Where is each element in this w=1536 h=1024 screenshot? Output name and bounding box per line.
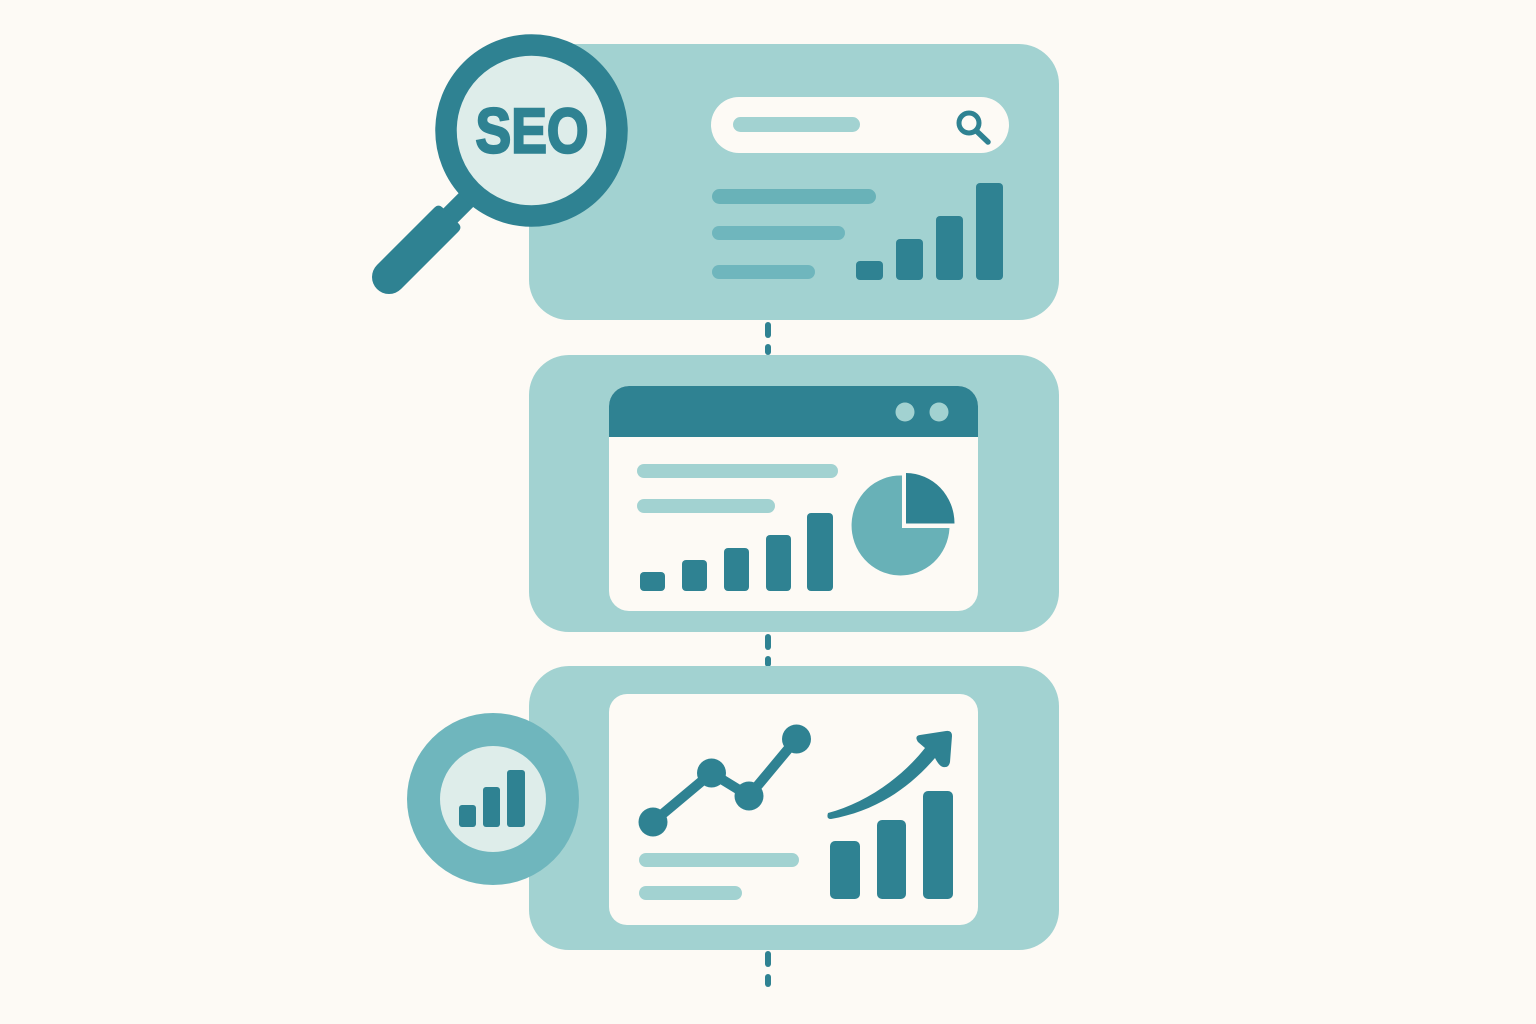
pie chart [852,473,954,575]
line chart [638,724,811,836]
bar chart [640,513,833,591]
bar chart [856,183,1003,280]
bar chart [830,791,953,899]
icon: circular bar chart badge [407,713,579,885]
growth arrow [827,731,952,819]
icon: SEO magnifying glass [365,45,617,301]
connector: dashes 3 [765,951,771,987]
SEO label: SEO [476,96,588,166]
text lines [637,464,838,513]
panel: growth card [529,666,1059,950]
search bar [711,97,1009,153]
white dashboard [609,694,978,925]
text lines [639,853,799,900]
connector: dashes 1 [765,322,771,355]
panel: search results card [529,44,1059,320]
browser window [609,386,978,611]
connector: dashes 2 [765,634,771,667]
text lines [712,189,876,279]
panel: analytics window card [529,355,1059,632]
